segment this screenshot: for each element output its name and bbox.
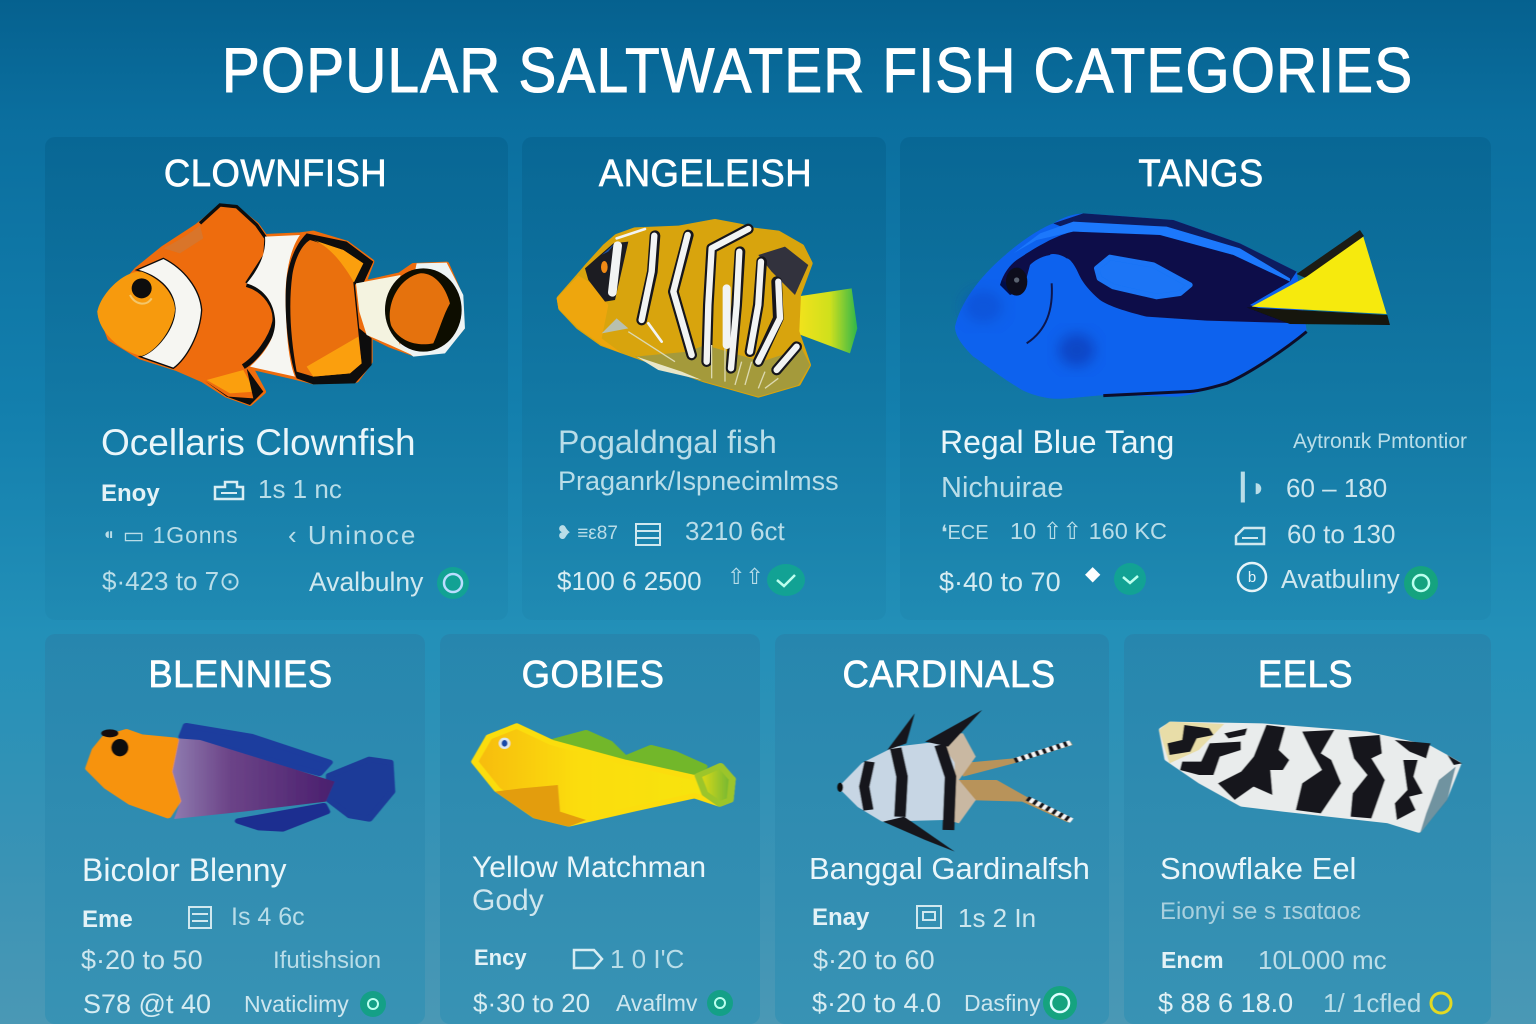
icon: yellow ring — [1430, 992, 1452, 1014]
heading: gobies: GOBIES — [522, 654, 664, 696]
text: angelfish details: Pogaldngal fish — [558, 424, 777, 460]
text: cardinals details: Banggal Gardinalfsh — [809, 851, 1090, 886]
panel: angelfish — [522, 137, 886, 620]
text: tangs details: 10 ⇧⇧ 160 KC — [1010, 518, 1167, 544]
text: tangs details: Avatbulıny — [1281, 566, 1400, 594]
icon: tag — [572, 948, 604, 970]
icon: status ring — [1404, 566, 1438, 600]
text: eels details: $ 88 6 18.0 — [1158, 988, 1293, 1018]
text: cardinals details — [809, 851, 1090, 1020]
text: clownfish details: Avalbulny — [309, 567, 423, 597]
icon: list box — [916, 905, 942, 929]
text: gobies details — [472, 851, 733, 1018]
icon: bicolor blenny — [89, 726, 392, 829]
text: tangs details: Aytronɪk Pmtontior — [1293, 430, 1467, 453]
text: blennies details: Is 4 6c — [231, 903, 305, 931]
icon: status ring — [437, 567, 469, 599]
text: clownfish details: Enoy — [101, 480, 160, 507]
text: gobies details: Ency — [474, 945, 527, 970]
text: clownfish details: $·423 to 7⊙ — [102, 566, 241, 596]
text: clownfish details: ⁌ ▭ 1Gonns — [103, 522, 239, 548]
text: clownfish details: 1s 1 nc — [258, 474, 342, 504]
text: cardinals details: Enay — [812, 904, 869, 931]
text: eels details: 10L000 mc — [1258, 945, 1387, 975]
text: blennies details: Ifutishsion — [273, 947, 381, 974]
text: cardinals details: $·20 to 60 — [813, 945, 935, 975]
text: tangs details: 60 to 130 — [1287, 519, 1395, 549]
text: tangs details — [939, 424, 1467, 600]
text: eels details: 1/ 1cfled — [1323, 988, 1421, 1018]
icon: tray — [214, 480, 244, 500]
text: gobies details: $·30 to 20 — [473, 988, 590, 1018]
text: tangs details: Nichuirae — [941, 472, 1064, 504]
text: angelfish details: ⇧⇧ — [727, 564, 764, 589]
panel: blennies — [45, 634, 425, 1024]
text: blennies details: Bicolor Blenny — [82, 852, 287, 888]
text: clownfish details: Ocellaris Clownfish — [101, 422, 416, 463]
panel: eels — [1124, 634, 1491, 1024]
text: clownfish details — [101, 422, 469, 599]
text: gobies details: Yellow Matchman — [472, 851, 706, 884]
text: tangs details: 60 – 180 — [1286, 473, 1387, 503]
text: eels details: Snowflake Eel — [1160, 851, 1356, 886]
text: gobies details: Avaflmv — [616, 990, 697, 1016]
icon: tray — [1234, 526, 1266, 546]
text: tangs details: ◆ — [1085, 563, 1100, 585]
text: tangs details: ┃◗ — [1235, 472, 1266, 502]
icon: list box — [635, 523, 661, 546]
heading: cardinals: CARDINALS — [842, 654, 1056, 696]
text: angelfish details — [556, 424, 839, 596]
icon: list box — [188, 906, 212, 929]
text: eels details — [1158, 851, 1452, 1018]
text: gobies details: 1 0 I'C — [610, 944, 684, 974]
icon: status ring — [707, 990, 733, 1016]
icon: angelfish — [557, 222, 857, 397]
icon: yellow matchman goby — [475, 726, 732, 827]
text: eels details: Eionyi se s ɪsɑtɑoɛ — [1160, 898, 1361, 925]
icon: snowflake eel — [1159, 722, 1462, 833]
heading: clownfish: CLOWNFISH — [164, 153, 387, 195]
icon: status ring — [360, 991, 386, 1017]
text: tangs details: Regal Blue Tang — [940, 424, 1174, 460]
heading: eels: EELS — [1258, 654, 1353, 696]
text: angelfish details: $100 6 2500 — [557, 566, 702, 596]
heading: blennies: BLENNIES — [148, 654, 333, 696]
text: eels details: Encm — [1161, 947, 1224, 973]
panel: tangs — [900, 137, 1491, 620]
heading: tangs: TANGS — [1138, 153, 1264, 195]
panel: cardinals — [775, 634, 1109, 1024]
text: cardinals details: 1s 2 In — [958, 903, 1036, 933]
text: cardinals details: $·20 to 4.0 — [812, 988, 941, 1018]
text: blennies details: S78 @t 40 — [83, 989, 211, 1019]
icon: status check — [1114, 563, 1146, 595]
icon: numbered ring: b — [1248, 569, 1256, 586]
text: blennies details: $·20 to 50 — [81, 945, 203, 975]
text: tangs details: $·40 to 70 — [939, 567, 1061, 597]
text: gobies details: Gody — [472, 884, 544, 917]
text: angelfish details: Praganrk/Ispnecimlmss — [558, 466, 839, 496]
panel: clownfish — [45, 137, 508, 620]
text: angelfish details: ❥ ≡ε87 — [556, 523, 618, 544]
icon: clownfish — [97, 205, 465, 405]
icon: status ring — [1043, 986, 1077, 1020]
icon: status check — [767, 564, 805, 596]
text: blennies details: Nvaticlimy — [244, 991, 349, 1017]
text: clownfish details: ‹ Uninoce — [288, 520, 417, 550]
heading: angelfish: ANGELEISH — [599, 153, 812, 195]
text: tangs details: ❛ECE — [941, 522, 989, 544]
icon: numbered ring — [1236, 562, 1268, 592]
icon: banggai cardinalfish — [837, 710, 1073, 852]
text: cardinals details: Dasfiny — [964, 990, 1041, 1016]
text: blennies details: Eme — [82, 906, 133, 933]
text: blennies details — [81, 852, 386, 1019]
icon: regal blue tang — [955, 213, 1390, 399]
text: angelfish details: 3210 6ct — [685, 516, 785, 546]
panel: gobies — [440, 634, 760, 1024]
title: POPULAR SALTWATER FISH CATEGORIES — [222, 36, 1413, 106]
